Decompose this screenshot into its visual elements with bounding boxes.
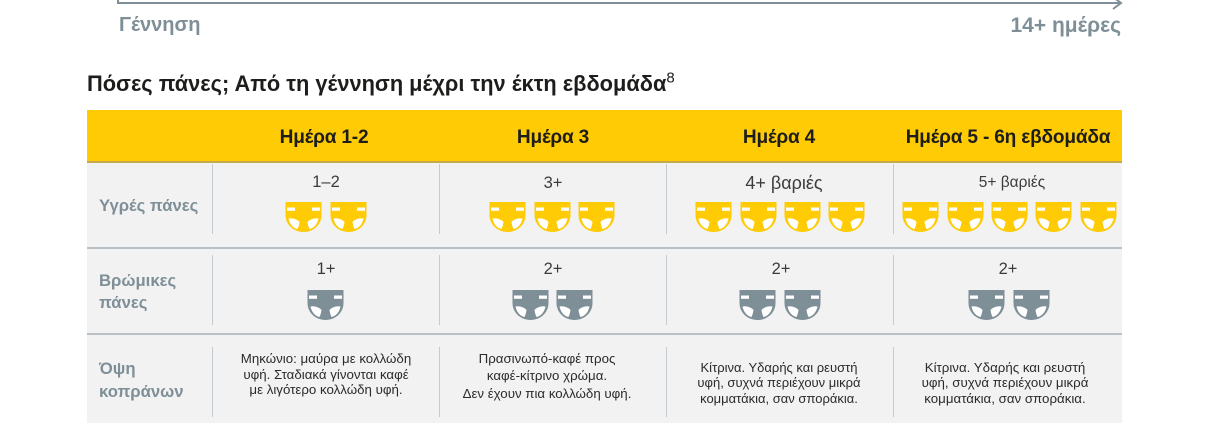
- row label: wet diapers: Υγρές πάνες: [99, 196, 198, 215]
- count: dirty day 1-2: 1+: [317, 260, 335, 278]
- count: wet day 1-2: 1–2: [312, 173, 340, 191]
- stool text: day 5: υφή, συχνά περιέχουν μικρά: [922, 375, 1088, 390]
- count: dirty day 5: 2+: [999, 260, 1017, 278]
- row label: dirty diapers: [99, 271, 176, 312]
- stool text: day 5: κομματάκια, σαν σποράκια.: [924, 391, 1086, 406]
- stool text: day 3: Δεν έχουν πια κολλώδη υφή.: [463, 386, 631, 401]
- row label: stool appearance: κοπράνων: [99, 382, 184, 401]
- row label: dirty diapers: Βρώμικες: [99, 271, 176, 290]
- icons: dirty diapers day 1-2: [308, 290, 344, 320]
- stool text: day 1-2: με λιγότερο κολλώδη υφή.: [249, 382, 403, 397]
- timeline end label: 14+ ημέρες: [1010, 14, 1121, 37]
- stool text: day 4: κομματάκια, σαν σποράκια.: [700, 391, 858, 406]
- stool text: day 1-2: Μηκώνιο: μαύρα με κολλώδη: [241, 351, 411, 366]
- count: wet day 4: 4+ βαριές: [745, 173, 823, 193]
- count: wet day 3: 3+: [544, 174, 562, 192]
- row label: stool appearance: Όψη: [99, 359, 136, 378]
- title: Πόσες πάνες; Από τη γέννηση μέχρι την έκτη εβδομάδα8: [87, 70, 675, 96]
- stool text: day 4: [697, 360, 861, 406]
- stool text: day 1-2: [241, 351, 411, 397]
- column heading: day 3: Ημέρα 3: [517, 127, 589, 148]
- icons: wet diapers day 4: [696, 202, 864, 232]
- count: dirty day 3: 2+: [544, 260, 562, 278]
- timeline arrow: [117, 0, 1122, 10]
- count: wet day 5: 5+ βαριές: [979, 174, 1045, 191]
- table: [87, 110, 1122, 423]
- stool text: day 5: [922, 360, 1088, 406]
- row divider: [87, 161, 1122, 163]
- stool text: day 3: [463, 351, 631, 401]
- row label: dirty diapers: πάνες: [99, 293, 147, 312]
- icons: wet diapers day 3: [490, 202, 614, 232]
- stool text: day 1-2: υφή. Σταδιακά γίνονται καφέ: [243, 367, 409, 382]
- column heading: day 4: Ημέρα 4: [743, 127, 815, 148]
- stool text: day 4: υφή, συχνά περιέχουν μικρά: [697, 375, 861, 390]
- stool text: day 3: Πρασινωπό-καφέ προς: [479, 351, 615, 366]
- icons: wet diapers day 1-2: [286, 202, 366, 232]
- icons: dirty diapers day 4: [740, 290, 820, 320]
- stool text: day 5: Κίτρινα. Υδαρής και ρευστή: [925, 360, 1085, 374]
- column heading: day 1-2: Ημέρα 1-2: [280, 127, 368, 148]
- column heading: day 5 to week 6: Ημέρα 5 - 6η εβδομάδα: [906, 127, 1110, 148]
- stool text: day 3: καφέ-κίτρινο χρώμα.: [487, 368, 607, 383]
- stool text: day 4: Κίτρινα. Υδαρής και ρευστή: [701, 360, 857, 374]
- row label: stool appearance: [98, 359, 184, 401]
- timeline start label: Γέννηση: [119, 14, 200, 36]
- icons: wet diapers day 5: [902, 202, 1116, 232]
- icons: dirty diapers day 3: [512, 290, 592, 320]
- header band: [87, 110, 1122, 161]
- count: dirty day 4: 2+: [772, 260, 790, 278]
- icons: dirty diapers day 5: [968, 290, 1050, 320]
